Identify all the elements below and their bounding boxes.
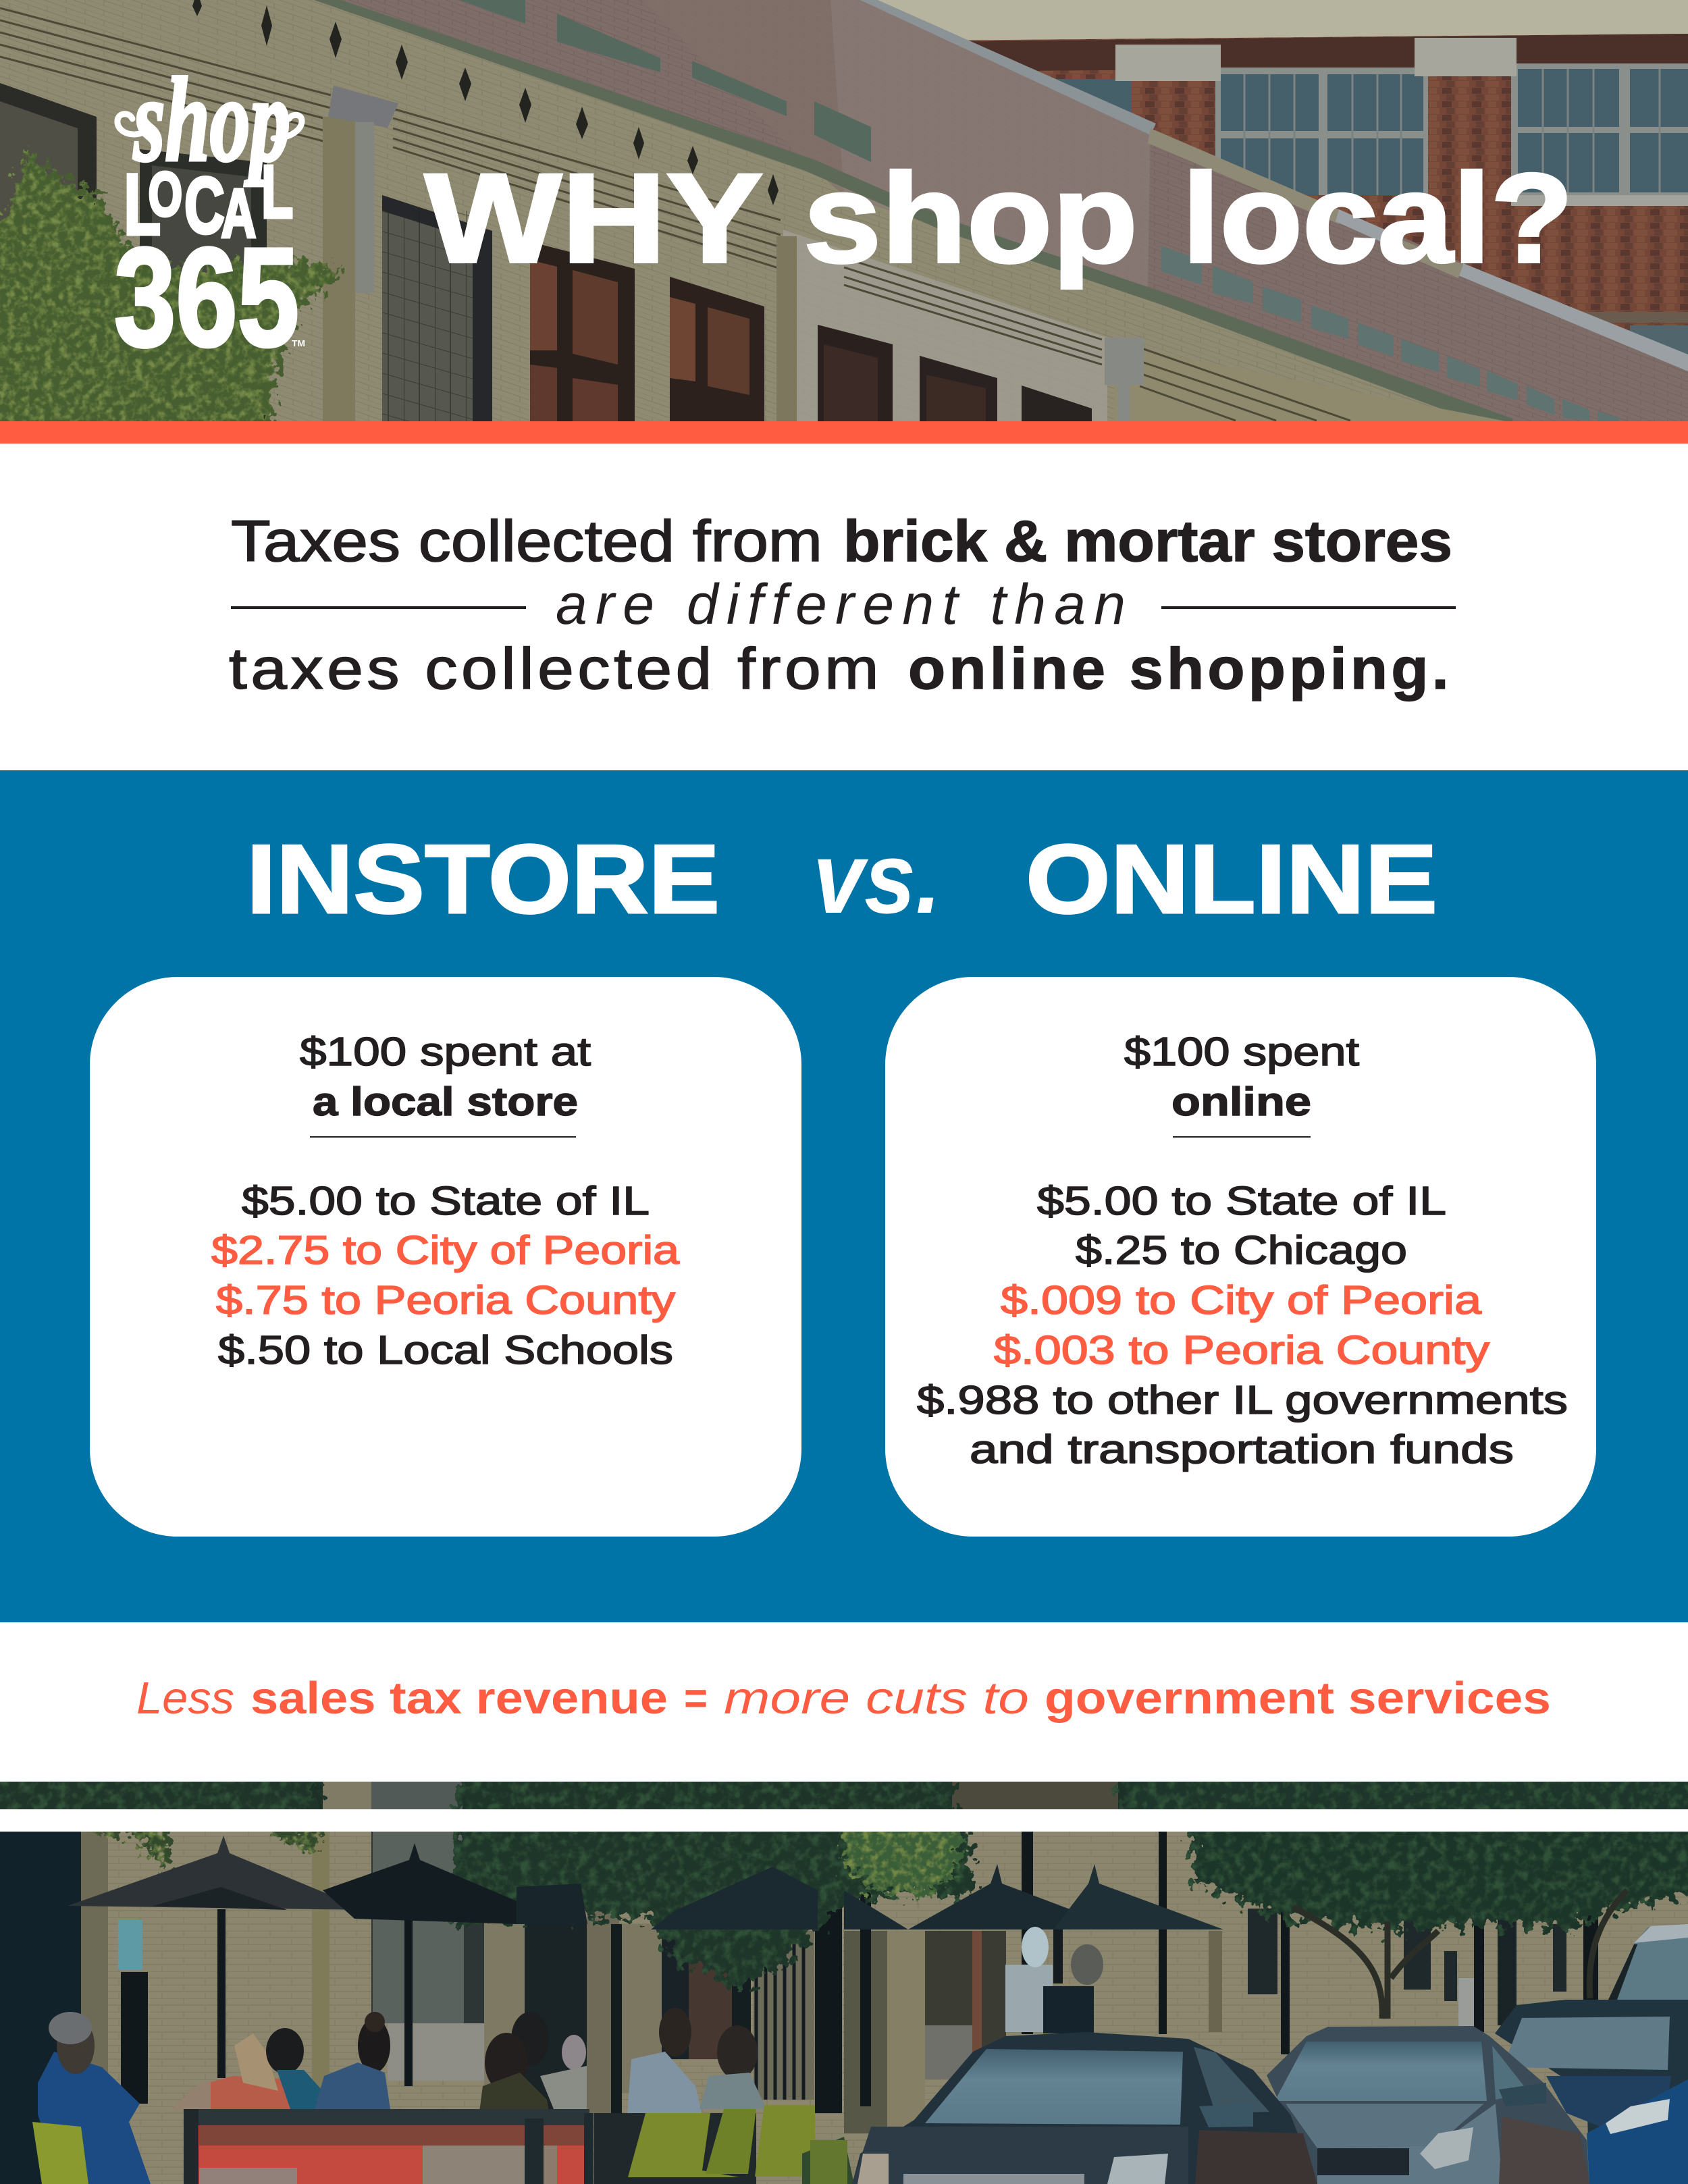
- online tax breakdown: [917, 1179, 1568, 1472]
- online tax breakdown: $.988 to other IL governments: [917, 1378, 1568, 1422]
- header photo: brick storefront building: [0, 0, 1688, 432]
- patio window: [371, 1832, 484, 2023]
- red planter box: [184, 2109, 594, 2184]
- delivery van: [1608, 1924, 1688, 2000]
- roof edge: [860, 0, 1156, 135]
- card heading: $100 spent online: online: [1171, 1080, 1311, 1124]
- footer statement: =: [684, 1673, 708, 1724]
- standing men: [1005, 1927, 1103, 2033]
- card heading: $100 spent at a local store: $100 spent at: [300, 1030, 591, 1074]
- green patio chairs and planter: [628, 2105, 854, 2184]
- instore tax breakdown: $.75 to Peoria County: [216, 1278, 676, 1323]
- diamonds: [192, 0, 779, 205]
- online tax breakdown: $.009 to City of Peoria: [1001, 1278, 1481, 1323]
- footer statement: government services: [1045, 1673, 1551, 1724]
- online tax breakdown: $5.00 to State of IL: [1037, 1179, 1446, 1223]
- dark building windows: [1248, 1909, 1566, 2001]
- logo word: LOCAL: A: [221, 174, 256, 252]
- intro statement: [229, 509, 1456, 701]
- online tax breakdown: $.25 to Chicago: [1076, 1228, 1407, 1273]
- logo word: shop: [117, 53, 302, 186]
- blue comparison panel: [0, 770, 1688, 1622]
- intro line 1: brick & mortar stores: [843, 509, 1452, 574]
- tree: [0, 152, 344, 432]
- logo: Shop Local 365: [114, 53, 305, 376]
- online tax breakdown: and transportation funds: [970, 1427, 1514, 1472]
- sign on post: [118, 1920, 142, 1970]
- intro line 1: Taxes collected from: [231, 509, 822, 574]
- parked car 3: [1495, 2000, 1688, 2184]
- online tax breakdown: $.003 to Peoria County: [994, 1328, 1490, 1373]
- title: local?: [1182, 147, 1573, 289]
- instore tax breakdown: [211, 1179, 679, 1373]
- footer statement: sales tax revenue: [250, 1673, 668, 1724]
- parked car 2: [1267, 2026, 1589, 2184]
- instore tax breakdown: $5.00 to State of IL: [242, 1179, 650, 1223]
- title: WHY: [425, 147, 763, 289]
- card: instore: [90, 977, 801, 1537]
- card heading: $100 spent at a local store: [300, 1030, 591, 1138]
- logo word: LOCAL: O: [149, 159, 182, 229]
- background brick building: [858, 0, 1688, 42]
- logo word: LOCAL: C: [184, 161, 225, 250]
- logo word: LOCAL: L: [124, 157, 161, 253]
- fascia above the green trim: [317, 0, 1688, 421]
- instore tax breakdown: $2.75 to City of Peoria: [211, 1228, 679, 1273]
- parked car 1: [852, 2032, 1317, 2184]
- green trim band: [314, 0, 1512, 425]
- card heading: $100 spent online: $100 spent: [1124, 1030, 1359, 1074]
- intro rule left: [231, 606, 526, 609]
- heading: INSTORE: INSTORE: [246, 824, 720, 934]
- iron gate and brick column: [525, 1911, 1006, 2133]
- poles: [121, 1832, 1598, 2113]
- pilaster and downspouts: [323, 117, 355, 422]
- orange divider band: [0, 421, 1688, 444]
- heading: ONLINE: ONLINE: [1026, 824, 1438, 934]
- street trees: [88, 1816, 1688, 2019]
- title: shop: [803, 147, 1138, 289]
- logo word: shop: shop: [133, 53, 290, 186]
- card heading: $100 spent at a local store: a local store: [313, 1080, 578, 1124]
- footer statement: Less: [136, 1673, 234, 1724]
- lighter painted lower wall: [783, 230, 1107, 421]
- table: [594, 2113, 756, 2184]
- intro line 2: are different than: [556, 572, 1126, 636]
- man in blue jacket: [32, 2012, 151, 2184]
- green glass panels on fascia: [459, 0, 871, 162]
- intro line 3: taxes collected from: [229, 637, 882, 701]
- instore tax breakdown: $.50 to Local Schools: [218, 1328, 673, 1373]
- photo: outdoor patio with diners and parked cars: [0, 1816, 1688, 2184]
- logo word: LOCAL: L: [261, 151, 293, 234]
- heading: vs.: vs.: [813, 821, 941, 934]
- photo strip: treetops: [0, 1782, 1688, 1809]
- ledge lines: [0, 8, 1350, 421]
- card heading: $100 spent online: [1124, 1030, 1359, 1138]
- footer statement: more cuts to: [724, 1673, 1029, 1724]
- umbrellas: [68, 1836, 1223, 1983]
- card: online: [885, 977, 1596, 1537]
- logo trademark: TM: [292, 338, 305, 348]
- intro line 3: online shopping.: [908, 637, 1452, 701]
- intro rule right: [1161, 606, 1456, 609]
- storefront windows: [0, 83, 1092, 422]
- diners: [172, 2008, 766, 2114]
- logo number: 365: 365: [114, 219, 299, 376]
